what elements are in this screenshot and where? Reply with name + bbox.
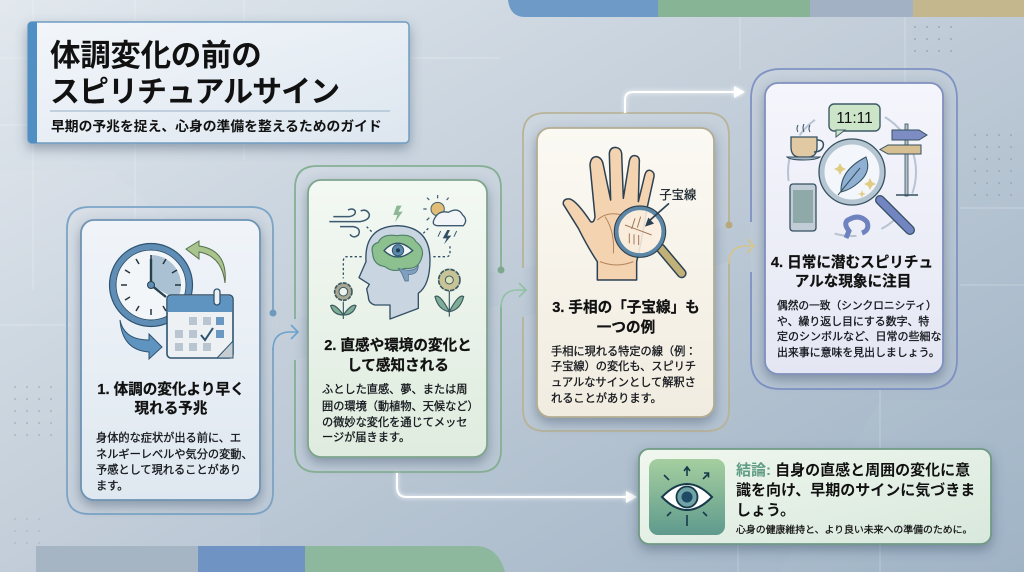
body: step 4: 出来事に意味を見出しましょう。	[777, 346, 940, 359]
body: step 4: 定のシンボルなど、日常の些細な	[777, 329, 941, 343]
icon: symbols under magnifier	[787, 104, 927, 238]
heading: step 1: 1. 体調の変化より早く	[97, 381, 245, 398]
heading: step 3: 一つの例	[597, 319, 655, 336]
body: step 2: ージが届きます。	[322, 430, 410, 444]
body: step 1: 身体的な症状が出る前に、エ	[96, 430, 241, 444]
icon: symbols under magnifier: 11:11	[836, 110, 873, 127]
icon: head, brain and nature	[329, 195, 466, 319]
body: step 1: ネルギーレベルや気分の変動、	[96, 447, 253, 461]
panel: step 4	[751, 69, 957, 389]
arrow: step 1 to 2	[273, 325, 298, 350]
bottom colour bar	[36, 546, 505, 572]
heading: step 4: アルな現象に注目	[795, 272, 911, 290]
panel: step 2	[295, 166, 526, 472]
label: child line: 子宝線	[659, 187, 697, 202]
arrow: step 3 up to step 4	[625, 86, 745, 113]
panel: conclusion	[639, 449, 991, 544]
top colour bar	[508, 0, 1024, 17]
body: step 2: 囲の環境（動植物、天候など）	[322, 399, 479, 413]
title panel	[28, 22, 409, 143]
panel: step 3	[523, 113, 754, 431]
heading: step 2: 2. 直感や環境の変化と	[324, 336, 472, 354]
conclusion text: 結論: 自身の直感と周囲の変化に意	[736, 461, 970, 479]
body: step 4: 偶然の一致（シンクロニシティ）	[777, 299, 937, 312]
heading: step 3: 3. 手相の「子宝線」も	[552, 298, 700, 316]
title heading: 体調変化の前の	[50, 39, 261, 73]
icon: eye	[649, 459, 725, 535]
body: step 4	[777, 299, 941, 359]
panel: step 1	[67, 207, 298, 514]
icon: clock and calendar	[110, 241, 233, 359]
conclusion text: 心身の健康維持と、より良い未来への準備のために。	[736, 523, 972, 536]
heading: step 4: 4. 日常に潜むスピリチュ	[771, 253, 933, 271]
title panel: スピリチュアルサイン	[50, 76, 339, 109]
body: step 1	[96, 430, 253, 492]
body: step 3: 子宝線）の変化も、スピリチ	[551, 360, 696, 373]
heading: step 4	[771, 253, 933, 290]
icon: palm with magnifier	[563, 147, 697, 280]
body: step 1: 予感として現れることがあり	[96, 462, 241, 476]
body: step 2: の微妙な変化を通じてメッセ	[322, 415, 467, 429]
conclusion text	[736, 461, 975, 536]
body: step 3: ュアルなサインとして解釈さ	[551, 375, 696, 389]
body: step 3	[551, 344, 696, 405]
body: step 2	[322, 382, 479, 444]
heading: step 1: 現れる予兆	[135, 400, 208, 417]
heading: step 2: して感知される	[347, 356, 449, 374]
heading: step 2	[324, 336, 472, 374]
arrow: step 2 down to conclusion	[397, 473, 637, 503]
heading: step 3	[552, 298, 700, 336]
body: step 3: 手相に現れる特定の線（例：	[551, 344, 696, 358]
conclusion text: しょう。	[736, 502, 795, 519]
subtitle: 早期の予兆を捉え、心身の準備を整えるためのガイド	[51, 118, 382, 134]
arrow: step 3 to 4	[729, 239, 754, 264]
heading: step 1	[97, 381, 245, 417]
arrow: step 2 to 3	[501, 283, 526, 308]
body: step 2: ふとした直感、夢、または周	[322, 382, 467, 396]
body: step 4: や、繰り返し目にする数字、特	[777, 314, 929, 328]
body: step 3: れることがあります。	[551, 391, 662, 405]
body: step 1: ます。	[96, 480, 128, 492]
conclusion text: 識を向け、早期のサインに気づきま	[736, 481, 975, 499]
